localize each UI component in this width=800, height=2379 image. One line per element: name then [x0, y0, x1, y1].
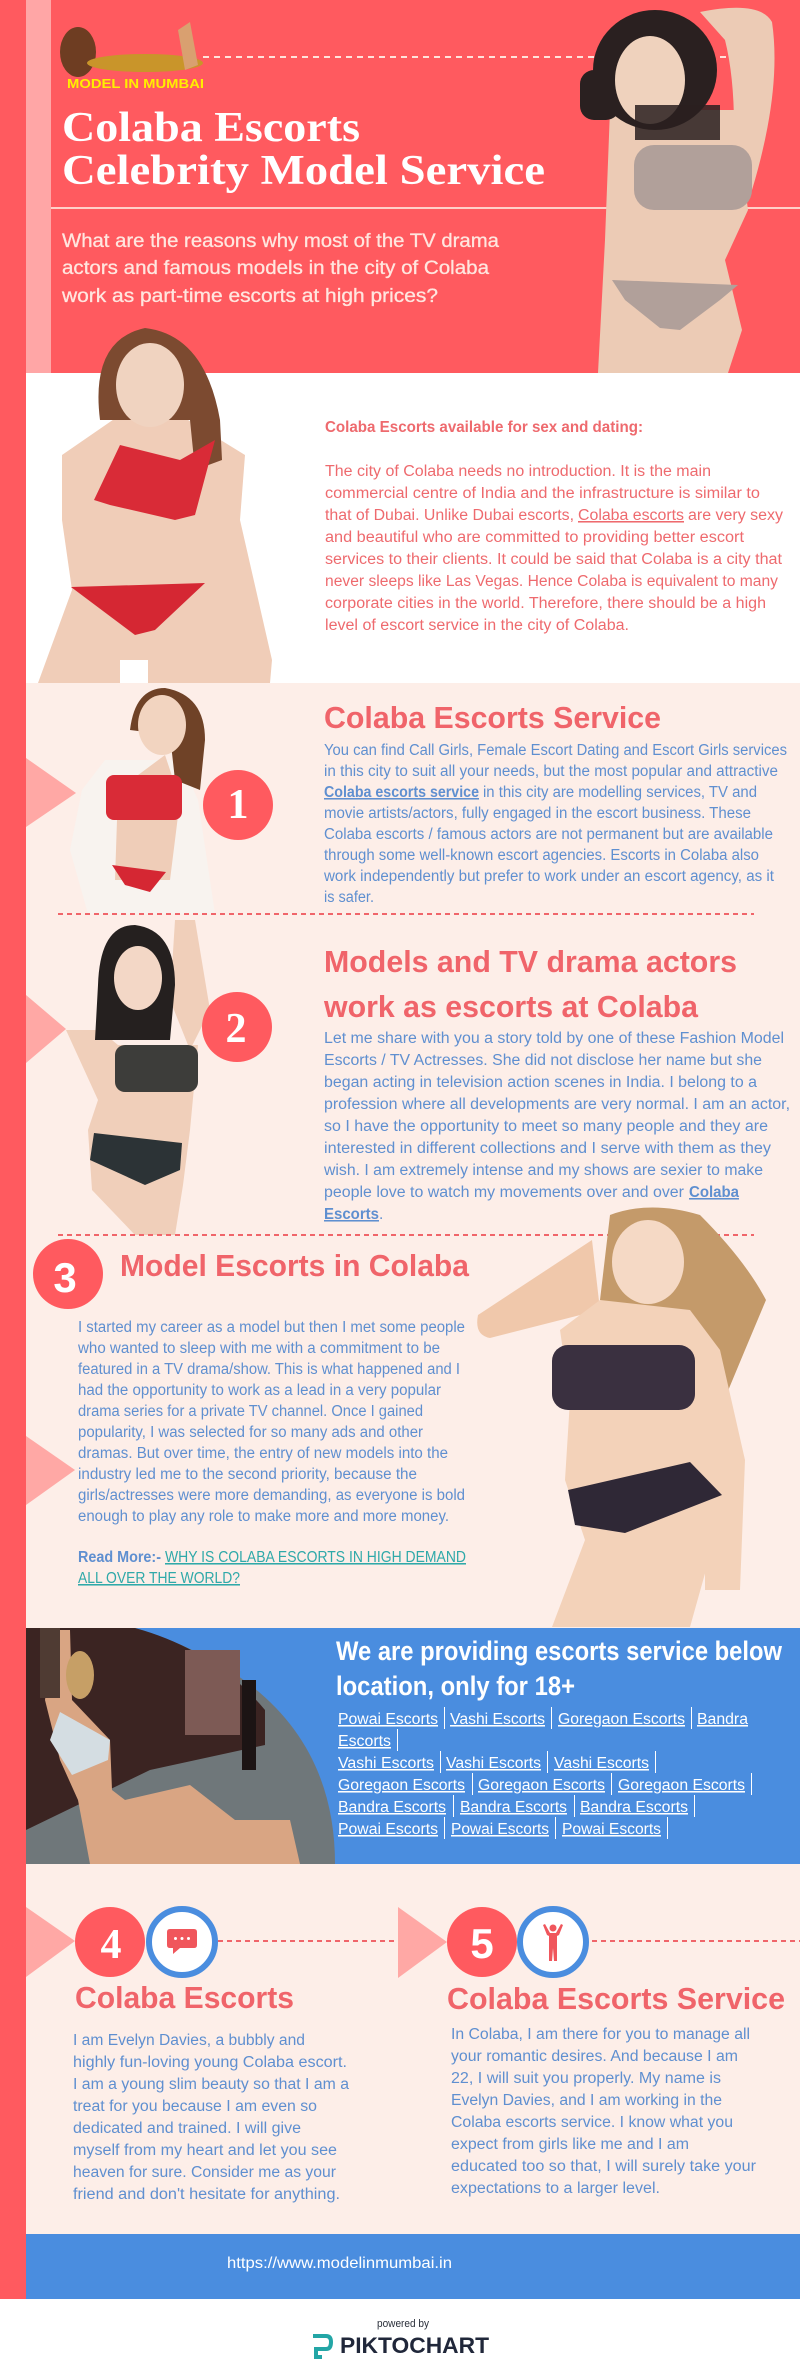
arrow: triangle 2 — [26, 995, 66, 1063]
location links — [338, 1707, 752, 1839]
text: section 1 body: Colaba escorts / famous actors are not permanent but are available — [324, 826, 773, 843]
credit: powered by piktochart: PIKTOCHART — [340, 2333, 490, 2358]
arrow: triangle 1 — [26, 758, 76, 827]
location links: Vashi Escorts — [450, 1711, 545, 1728]
image placeholder: blonde model — [477, 1208, 766, 1627]
text: intro body: Colaba escorts — [578, 507, 684, 524]
number badge 2 — [202, 992, 272, 1062]
text: intro body: The city of Colaba needs no introduction. It is the main — [325, 463, 711, 480]
title: Celebrity Model Service — [62, 148, 545, 194]
text: section 3 body: drama series for a private TV channel. Once I gained — [78, 1403, 423, 1420]
text: section 4 body: heaven for sure. Consider me as your — [73, 2164, 336, 2181]
location links: Escorts — [338, 1733, 391, 1750]
logo: MODEL IN MUMBAI — [67, 76, 204, 91]
text: intro body: and beautiful who are committed to providing better escort — [325, 529, 745, 546]
text: section 5 body: expectations to a larger level. — [451, 2180, 660, 2197]
text: section 3 body: enough to play any role to make more and more money. — [78, 1508, 449, 1525]
image placeholder: model top right — [580, 8, 774, 373]
text: section 3 body: had the opportunity to work as a lead in a very popular — [78, 1382, 441, 1399]
location links: Powai Escorts — [338, 1711, 438, 1728]
location links: Powai Escorts — [451, 1821, 549, 1838]
number badge 3 — [33, 1239, 103, 1309]
text: section 1 body: work independently but prefer to work under an escort agency, as it — [323, 868, 775, 885]
text: section 5 body: Evelyn Davies, and I am working in the — [451, 2092, 722, 2109]
number badge 2: 2 — [226, 1006, 246, 1052]
text: intro heading: Colaba Escorts available for sex and dating: — [325, 419, 643, 436]
image placeholder: rooftop photo — [26, 1628, 335, 1864]
text: section 3 body: industry led me to the second priority, because the — [78, 1466, 417, 1483]
location links: Bandra Escorts — [580, 1799, 688, 1816]
heading 2: work as escorts at Colaba — [323, 989, 699, 1024]
number badge 4 — [75, 1907, 145, 1977]
text: section 3 body: I started my career as a model but then I met some people — [78, 1319, 465, 1336]
number badge 3: 3 — [53, 1254, 77, 1301]
location links: Goregaon Escorts — [618, 1777, 745, 1794]
icon: person with raised arms — [520, 1909, 586, 1975]
text: read more link: Read More:- — [78, 1549, 161, 1566]
panel: intro — [26, 328, 800, 683]
text: read more link — [78, 1549, 466, 1587]
icon: chat bubble — [149, 1909, 215, 1975]
panel: locations band — [26, 1628, 800, 1864]
location links: Bandra — [697, 1711, 748, 1728]
text: intro body: services to their clients. It could be said that Colaba is a city that — [325, 551, 783, 568]
text: section 2 body: people love to watch my movements over and over — [324, 1184, 684, 1201]
section 5 — [398, 1907, 800, 2197]
subtitle: What are the reasons why most of the TV drama — [62, 231, 499, 252]
text: section 5 body: In Colaba, I am there for you to manage all — [451, 2026, 750, 2043]
panel: header — [26, 0, 800, 373]
location links: Goregaon Escorts — [558, 1711, 685, 1728]
text: section 2 body: profession where all developments are very normal. I am an actor, — [324, 1096, 790, 1113]
title: Colaba Escorts — [62, 105, 360, 151]
number badge 1: 1 — [228, 782, 248, 828]
text: section 3 body: featured in a TV drama/show. This is what happened and I — [78, 1361, 460, 1378]
text: section 4 body: I am a young slim beauty so that I am a — [73, 2076, 349, 2093]
number badge 4: 4 — [100, 1922, 122, 1968]
text: section 2 body: . — [379, 1206, 383, 1223]
text: section 2 body: Escorts — [324, 1206, 379, 1223]
arrow: triangle 4 — [26, 1907, 75, 1977]
panel: footer band — [26, 2234, 800, 2299]
text: intro body — [325, 463, 783, 634]
text: section 4 body — [73, 2032, 349, 2203]
text: section 4 body: I am Evelyn Davies, a bubbly and — [73, 2032, 305, 2049]
text: section 3 body — [77, 1319, 465, 1525]
heading 4: Colaba Escorts — [75, 1980, 294, 2015]
text: section 1 body: movie artists/actors, fully engaged in the escort business. These — [324, 805, 751, 822]
arrow: triangle 3 — [26, 1436, 75, 1505]
text: section 1 body — [323, 742, 787, 906]
text: section 5 body: expect from girls like me and I am — [451, 2136, 689, 2153]
footer url: https://www.modelinmumbai.in — [227, 2255, 452, 2272]
location links: Bandra Escorts — [460, 1799, 567, 1816]
heading: locations: location, only for 18+ — [336, 1671, 575, 1701]
heading 3: Model Escorts in Colaba — [120, 1248, 470, 1283]
subtitle: actors and famous models in the city of Colaba — [62, 258, 489, 279]
text: section 4 body: treat for you because I am even so — [73, 2098, 317, 2115]
number badge 5 — [447, 1907, 517, 1977]
text: section 3 body: popularity, I was selected for so many ads and other — [78, 1424, 423, 1441]
section 2 — [26, 920, 790, 1235]
text: section 4 body: highly fun-loving young Colaba escort. — [73, 2054, 347, 2071]
text: read more link: WHY IS COLABA ESCORTS IN HIGH DEMAND — [165, 1549, 466, 1566]
text: section 2 body: wish. I am extremely intense and my shows are sexier to make — [323, 1162, 763, 1179]
heading: locations — [336, 1636, 783, 1701]
text: section 4 body: dedicated and trained. I will give — [73, 2120, 301, 2137]
text: section 5 body: Colaba escorts service. I know what you — [451, 2114, 733, 2131]
heading 5: Colaba Escorts Service — [447, 1981, 785, 2016]
text: intro body: that of Dubai. Unlike Dubai escorts, — [325, 507, 574, 524]
panel: peach background — [26, 683, 800, 2234]
subtitle — [61, 231, 499, 307]
credit: powered by piktochart — [313, 2318, 490, 2358]
icon: piktochart logo — [313, 2336, 331, 2357]
text: section 4 body: myself from my heart and let you see — [73, 2142, 337, 2159]
heading 1: Colaba Escorts Service — [324, 700, 661, 735]
text: intro body: level of escort service in the city of Colaba. — [325, 617, 629, 634]
section 3 — [26, 1208, 766, 1627]
location links: Powai Escorts — [338, 1821, 438, 1838]
text: section 2 body: interested in different collections and I serve with them as they — [324, 1140, 771, 1157]
text: section 1 body: in this city are modelling services, TV and — [483, 784, 757, 801]
text: intro body: corporate cities in the world. Therefore, there should be a high — [325, 595, 766, 612]
text: section 1 body: is safer. — [324, 889, 374, 906]
image placeholder: model in black — [66, 920, 210, 1235]
text: section 5 body: educated too so that, I will surely take your — [451, 2158, 756, 2175]
text: section 3 body: who wanted to sleep with me with a commitment to be — [77, 1340, 440, 1357]
text: section 2 body: began acting in television action scenes in India. I belong to a — [324, 1074, 757, 1091]
heading 2: Models and TV drama actors — [324, 944, 737, 979]
text: section 3 body: girls/actresses were more demanding, as everyone is bold — [78, 1487, 465, 1504]
text: intro body: never sleeps like Las Vegas. Hence Colaba is equivalent to many — [325, 573, 778, 590]
text: section 1 body: through some well-known escort agencies. Escorts in Colaba also — [324, 847, 759, 864]
arrow: triangle 5 — [398, 1907, 447, 1978]
text: section 5 body — [451, 2026, 756, 2197]
text: section 4 body: friend and don't hesitate for anything. — [73, 2186, 340, 2203]
location links: Goregaon Escorts — [338, 1777, 465, 1794]
number badge 5: 5 — [470, 1920, 494, 1967]
location links: Vashi Escorts — [554, 1755, 649, 1772]
text: section 1 body: Colaba escorts service — [324, 784, 479, 801]
section 1 — [26, 688, 787, 914]
text: read more link: ALL OVER THE WORLD? — [78, 1570, 240, 1587]
location links: Vashi Escorts — [338, 1755, 434, 1772]
section 4 — [26, 1907, 398, 2203]
image placeholder: model with white robe — [70, 688, 215, 914]
text: section 3 body: dramas. But over time, the entry of new models into the — [78, 1445, 448, 1462]
text: section 2 body — [323, 1030, 790, 1223]
text: section 2 body: so I have the opportunity to meet so many people and they are — [324, 1118, 768, 1135]
location links: Powai Escorts — [562, 1821, 661, 1838]
text: intro body: are very sexy — [688, 507, 783, 524]
text: section 2 body: Colaba — [689, 1184, 739, 1201]
logo — [60, 22, 204, 91]
text: section 1 body: You can find Call Girls, Female Escort Dating and Escort Girls services — [324, 742, 787, 759]
location links: Goregaon Escorts — [478, 1777, 605, 1794]
text: section 5 body: your romantic desires. And because I am — [451, 2048, 738, 2065]
heading 2 — [323, 944, 737, 1024]
text: section 2 body: Escorts / TV Actresses. She did not disclose her name but she — [324, 1052, 762, 1069]
image placeholder: model in red — [38, 328, 272, 683]
text: section 1 body: in this city to suit all your needs, but the most popular and attractive — [324, 763, 778, 780]
number badge 1 — [203, 770, 273, 840]
subtitle: work as part-time escorts at high prices? — [61, 286, 438, 307]
panel: left stripe — [0, 0, 26, 2299]
title — [62, 105, 545, 194]
credit: powered by piktochart: powered by — [377, 2318, 429, 2330]
location links: Bandra Escorts — [338, 1799, 446, 1816]
text: intro body: commercial centre of India and the infrastructure is similar to — [325, 485, 760, 502]
text: section 2 body: Let me share with you a story told by one of these Fashion Model — [324, 1030, 784, 1047]
text: section 5 body: 22, I will suit you properly. My name is — [451, 2070, 721, 2087]
location links: Vashi Escorts — [446, 1755, 541, 1772]
